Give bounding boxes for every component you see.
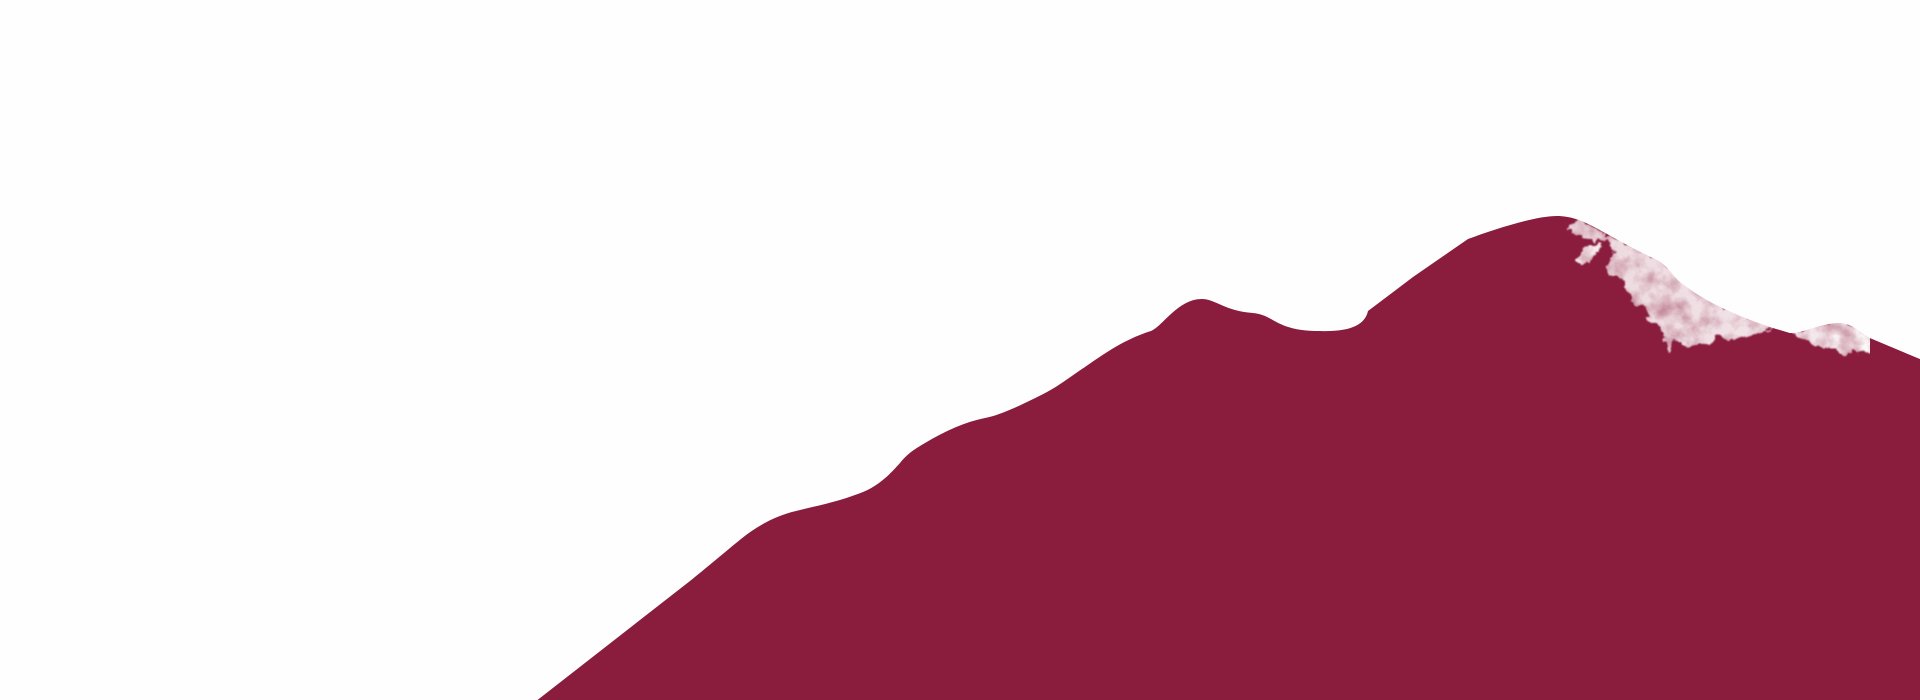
snow patch: main slope [1605, 236, 1772, 353]
snow patch: right ridge [1792, 323, 1870, 357]
background mask above right ridge [1540, 190, 1920, 359]
snow patch: summit [1568, 220, 1607, 240]
snow patch: small white streak [1575, 242, 1602, 265]
illustration: mountain with snowy peak [538, 216, 1920, 700]
mountain silhouette [538, 216, 1920, 700]
snow cap [1568, 220, 1876, 357]
